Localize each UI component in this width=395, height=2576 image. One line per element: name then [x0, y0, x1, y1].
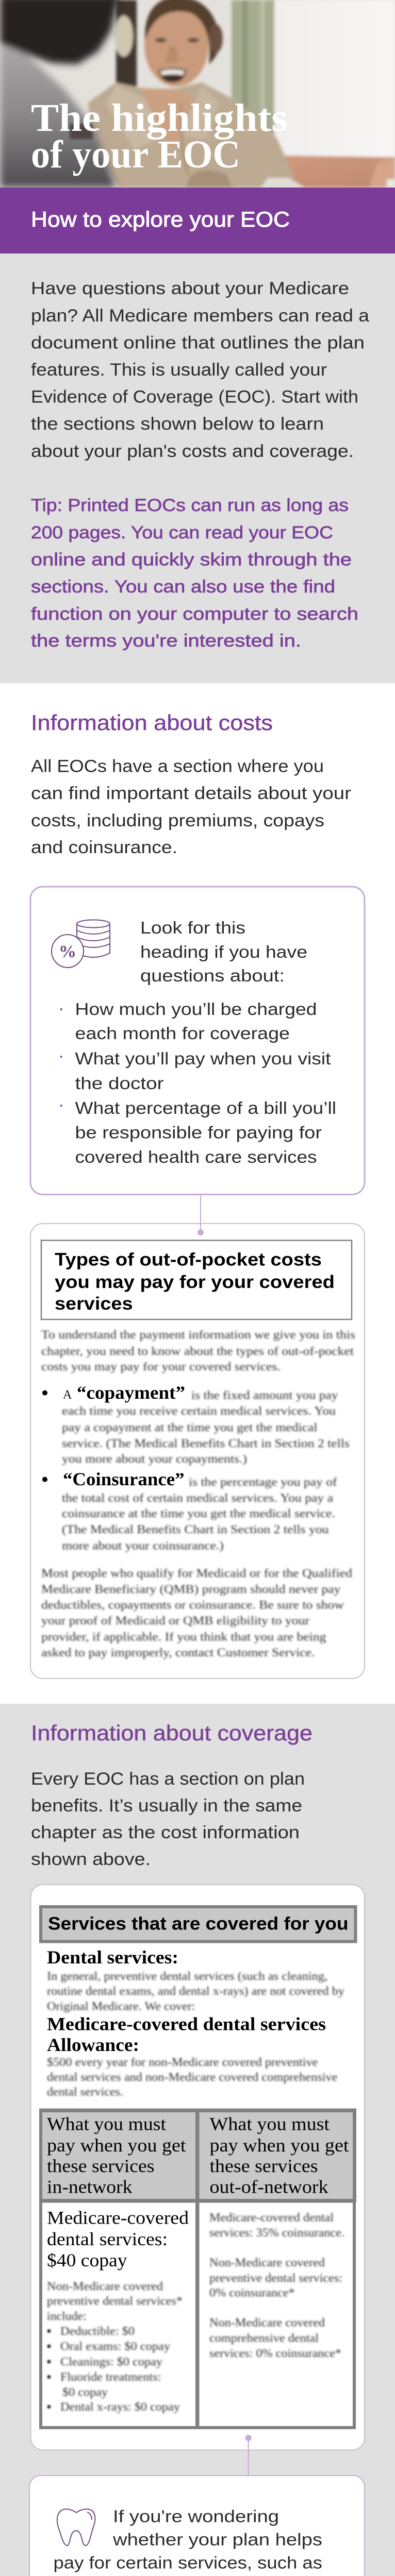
coverage description text: chapter as the cost information: [31, 1823, 300, 1842]
connector: costs panel to excerpt: [198, 1195, 204, 1235]
out-of-network column header: these services: [209, 2156, 318, 2176]
purple subtitle band: How to explore your EOC: [31, 207, 290, 231]
blurred excerpt closing paragraph: your proof of Medicaid or QMB eligibility to your: [41, 1614, 309, 1627]
costs description text: [31, 756, 351, 857]
medicare-covered dental services heading: Allowance:: [47, 2035, 139, 2055]
coinsurance definition: coinsurance at the time you get the medical service.: [62, 1507, 335, 1520]
blurred out-of-network details: Medicare-covered dental: [209, 2211, 334, 2224]
panel intro text: [140, 918, 307, 985]
panel: EOC dental services table: [31, 1885, 365, 2450]
panel intro text: Look for this: [140, 918, 245, 937]
callout text: If you're wondering: [113, 2507, 279, 2526]
medicare-covered dental services heading: Medicare-covered dental services: [47, 2013, 326, 2034]
blurred in-network details: Oral exams: $0 copay: [60, 2340, 171, 2352]
title: of your EOC: [31, 133, 240, 176]
coverage description text: [31, 1769, 305, 1869]
tip text block: function on your computer to search: [31, 604, 358, 624]
panel intro text: heading if you have: [140, 942, 307, 961]
copayment definition: service. (The Medical Benefits Chart in Section 2 tells: [62, 1437, 350, 1450]
blurred in-network details: [47, 2280, 183, 2413]
coinsurance definition: is the percentage you pay of: [189, 1476, 337, 1488]
copayment definition: “copayment”: [77, 1382, 185, 1403]
bullet list of questions: covered health care services: [75, 1147, 317, 1166]
in-network copay: Medicare-covered: [47, 2207, 189, 2228]
coverage description text: benefits. It’s usually in the same: [31, 1796, 302, 1816]
out-of-network column header: out-of-network: [209, 2176, 328, 2197]
intro text block: about your plan's costs and coverage.: [31, 442, 354, 461]
icon: percent and coin stack: %: [59, 942, 76, 961]
blurred allowance description: dental services.: [47, 2086, 123, 2098]
intro text block: features. This is usually called your: [31, 360, 327, 380]
in-network column header: What you must: [47, 2113, 166, 2134]
bullet list of questions: each month for coverage: [75, 1024, 290, 1043]
intro text block: document online that outlines the plan: [31, 333, 365, 352]
heading: information about coverage: Information about coverage: [31, 1721, 312, 1745]
bullet list of questions: be responsible for paying for: [75, 1123, 322, 1142]
bullet list of questions: How much you’ll be charged: [75, 999, 317, 1019]
blurred excerpt closing paragraph: Medicare Beneficiary (QMB) program should never pay: [41, 1583, 341, 1596]
excerpt heading box: services: [55, 1294, 133, 1314]
blurred out-of-network details: comprehensive dental: [209, 2332, 319, 2344]
blurred in-network details: Fluoride treatments:: [60, 2370, 161, 2383]
blurred excerpt closing paragraph: Most people who qualify for Medicaid or for the Qualified: [41, 1567, 353, 1580]
blurred in-network details: preventive dental services*: [47, 2295, 183, 2307]
costs description text: costs, including premiums, copays: [31, 811, 324, 831]
blurred excerpt closing paragraph: deductibles, copayments or coinsurance. Be sure to show: [41, 1598, 344, 1612]
in-network copay: [47, 2207, 189, 2270]
out-of-network column header: pay when you get: [209, 2135, 349, 2156]
callout text: pay for certain services, such as: [54, 2553, 322, 2572]
blurred out-of-network details: services: 0% coinsurance*: [209, 2347, 341, 2360]
blurred in-network details: $0 copay: [62, 2385, 108, 2399]
blurred excerpt closing paragraph: asked to pay improperly, contact Customer Service.: [41, 1646, 315, 1659]
costs description text: can find important details about your: [31, 784, 351, 803]
coinsurance definition: (The Medical Benefits Chart in Section 2 tells you: [62, 1523, 329, 1536]
copayment definition: pay a copayment at the time you get the medical: [62, 1421, 318, 1434]
table heading bar: [41, 1907, 356, 1941]
blurred out-of-network details: services: 35% coinsurance.: [209, 2226, 344, 2239]
coinsurance definition: more about your coinsurance.): [62, 1539, 224, 1552]
blurred dental services description: Original Medicare. We cover:: [47, 2000, 195, 2012]
costs description text: All EOCs have a section where you: [31, 756, 324, 776]
excerpt heading box: [41, 1241, 352, 1319]
copayment definition: [42, 1382, 350, 1465]
coverage description text: Every EOC has a section on plan: [31, 1769, 305, 1789]
blurred in-network details: Non-Medicare covered: [47, 2280, 163, 2293]
heading: information about costs: Information about costs: [31, 710, 273, 735]
in-network column header: these services: [47, 2156, 155, 2176]
blurred dental services description: In general, preventive dental services (such as cleaning,: [47, 1970, 327, 1982]
in-network column header: pay when you get: [47, 2135, 186, 2156]
out-of-network column header: What you must: [209, 2113, 330, 2134]
blurred out-of-network details: Non-Medicare covered: [209, 2256, 325, 2269]
blurred dental services description: [47, 1970, 345, 2012]
callout text: whether your plan helps: [112, 2530, 322, 2549]
blurred excerpt closing paragraph: [41, 1567, 353, 1659]
blurred allowance description: dental services and non-Medicare covered comprehensive: [47, 2071, 337, 2083]
blurred in-network details: Deductible: $0: [60, 2325, 135, 2337]
blurred allowance description: $500 every year for non-Medicare covered preventive: [47, 2056, 318, 2069]
bullet list of questions: What you’ll pay when you visit: [75, 1049, 331, 1068]
blurred in-network details: Dental x-rays: $0 copay: [60, 2400, 180, 2413]
excerpt heading box: you may pay for your covered: [55, 1272, 335, 1292]
blurred dental services description: routine dental exams, and dental x-rays) are not covered by: [47, 1985, 345, 1997]
tip text block: the terms you're interested in.: [31, 631, 301, 651]
coinsurance definition: “Coinsurance”: [63, 1469, 185, 1489]
hero photo: smiling woman: [0, 0, 395, 188]
tip text block: Tip: Printed EOCs can run as long as: [31, 496, 349, 515]
purple subtitle band: [0, 188, 395, 253]
in-network copay: $40 copay: [47, 2250, 127, 2270]
blurred excerpt intro: costs you may pay for your covered services.: [41, 1360, 281, 1373]
panel: costs questions: [30, 887, 365, 1194]
intro text block: [31, 279, 369, 461]
costs description text: and coinsurance.: [31, 838, 177, 857]
blurred excerpt intro: chapter, you need to know about the types of out-of-pocket: [41, 1345, 354, 1358]
copayment definition: each time you receive certain medical services. You: [62, 1404, 336, 1417]
coverage description text: shown above.: [31, 1850, 151, 1869]
excerpt heading box: Types of out-of-pocket costs: [55, 1250, 322, 1269]
blurred excerpt intro: To understand the payment information we give you in this: [41, 1328, 355, 1341]
icon: tooth: [57, 2509, 95, 2546]
intro text block: Have questions about your Medicare: [31, 279, 349, 298]
in-network copay: dental services:: [47, 2229, 168, 2249]
tip text block: online and quickly skim through the: [31, 550, 352, 570]
title: [31, 96, 288, 176]
in-network column header: [47, 2113, 186, 2197]
copayment definition: you more about your copayments.): [62, 1452, 247, 1465]
panel intro text: questions about:: [140, 966, 285, 985]
blurred in-network details: include:: [47, 2310, 87, 2323]
callout text: [54, 2507, 322, 2576]
out-of-network column header: [209, 2113, 349, 2197]
intro text block: plan? All Medicare members can read a: [31, 306, 369, 326]
bullet list of questions: the doctor: [75, 1074, 164, 1093]
dental services heading: Dental services:: [47, 1947, 178, 1968]
tip text block: [31, 496, 358, 651]
copayment definition: is the fixed amount you pay: [191, 1389, 338, 1401]
title: The highlights: [31, 96, 288, 140]
callout: certain services: [29, 2476, 365, 2576]
icon: percent and coin stack: [52, 920, 110, 968]
blurred out-of-network details: [209, 2211, 344, 2360]
copayment definition: A: [63, 1388, 72, 1401]
blurred excerpt intro: [41, 1328, 355, 1373]
panel: EOC excerpt on out-of-pocket costs: [30, 1224, 365, 1679]
blurred out-of-network details: Non-Medicare covered: [209, 2316, 325, 2329]
cost comparison table: [39, 2108, 356, 2429]
blurred excerpt closing paragraph: provider, if applicable. If you think that you are being: [41, 1630, 326, 1643]
in-network column header: in-network: [47, 2176, 132, 2197]
coinsurance definition: the total cost of certain medical services. You pay a: [62, 1492, 333, 1504]
bullet list of questions: What percentage of a bill you’ll: [75, 1098, 336, 1117]
bullet list of questions: [60, 999, 336, 1166]
connector: dental table to tooth callout: [245, 2435, 252, 2476]
blurred allowance description: [47, 2056, 337, 2098]
table heading bar: Services that are covered for you: [48, 1913, 349, 1934]
coinsurance definition: [42, 1469, 337, 1552]
blurred in-network details: Cleanings: $0 copay: [60, 2355, 163, 2368]
intro text block: the sections shown below to learn: [31, 414, 324, 434]
medicare-covered dental services heading: [47, 2013, 326, 2055]
section: information about costs background: [0, 683, 395, 1704]
blurred out-of-network details: preventive dental services:: [209, 2272, 342, 2284]
blurred out-of-network details: 0% coinsurance*: [209, 2286, 295, 2299]
tip text block: sections. You can also use the find: [31, 577, 335, 597]
intro text block: Evidence of Coverage (EOC). Start with: [31, 387, 358, 407]
tip text block: 200 pages. You can read your EOC: [31, 523, 333, 543]
